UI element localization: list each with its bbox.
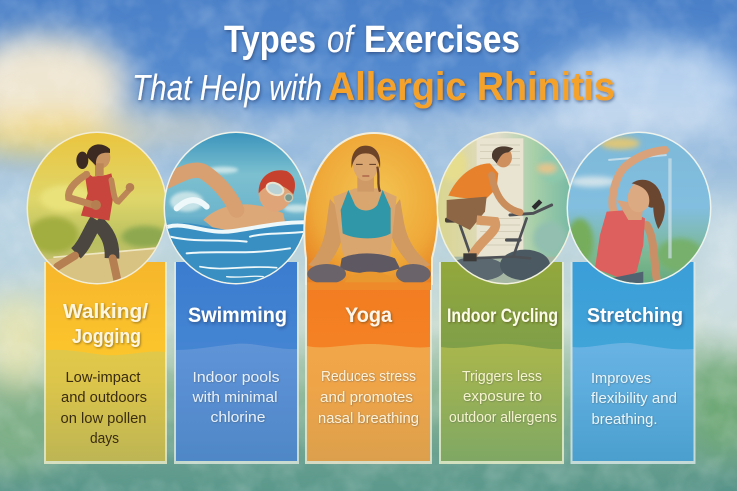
description: Walking/Jogging [60,369,147,447]
description: Stretching: Improves [591,370,651,387]
description: Walking/Jogging: Low-impact [66,369,141,386]
description: Indoor Cycling: Triggers less [462,369,542,385]
description: Walking/Jogging: and outdoors [61,389,147,406]
description: Indoor Cycling [449,369,557,426]
illustration: meditating woman [303,132,438,290]
description: Swimming: chlorine [210,409,266,426]
title: of [327,19,356,61]
description: Swimming: Indoor pools [192,369,280,386]
heading: Walking/Jogging [63,301,148,348]
illustration: runner [26,132,166,284]
description: Stretching: breathing. [592,411,658,428]
description: Swimming [191,369,280,426]
heading: Swimming: Swimming [188,304,287,327]
description: Yoga [318,369,419,427]
description: Walking/Jogging: days [90,430,119,447]
description: Walking/Jogging: on low pollen [60,410,146,427]
description: Stretching: flexibility and [591,390,677,407]
heading: Stretching: Stretching [587,305,683,327]
heading: Yoga: Yoga [345,304,392,327]
title: That Help with [132,67,322,108]
illustration: indoor cyclist [436,132,570,284]
card: Indoor Cycling [436,132,570,464]
description: Swimming: with minimal [191,389,278,406]
illustration: swimmer [164,132,308,284]
description: Yoga: nasal breathing [318,411,419,427]
illustration: woman stretching [566,132,712,284]
heading: Walking/Jogging: Walking/ [63,301,148,323]
title: Types [224,19,316,61]
title [132,19,615,109]
heading: Walking/Jogging: Jogging [72,326,141,348]
card: Walking/Jogging [26,132,167,464]
card: Swimming [160,125,315,464]
title: Allergic Rhinitis [328,65,615,109]
heading: Indoor Cycling: Indoor Cycling [447,306,558,327]
description: Indoor Cycling: exposure to [463,389,542,405]
card: Stretching [565,125,715,464]
description: Yoga: and promotes [320,390,413,406]
description: Indoor Cycling: outdoor allergens [449,410,557,426]
description: Stretching [591,370,677,428]
title: Exercises [364,19,520,61]
description: Yoga: Reduces stress [321,369,416,385]
card: Yoga [303,132,438,464]
